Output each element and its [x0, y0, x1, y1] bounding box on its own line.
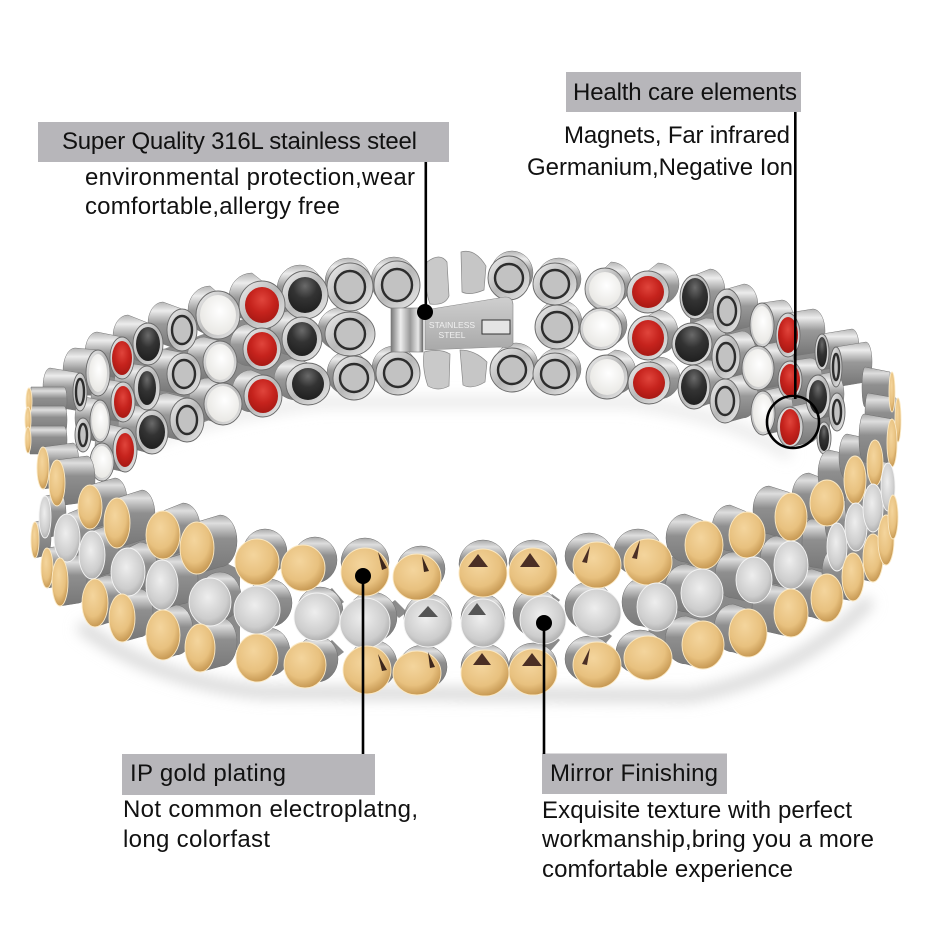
shadow: bracelet ground shadows — [80, 402, 870, 696]
callout: Mirror Finishing: Exquisite texture with perfect — [542, 797, 852, 824]
callout: Super Quality 316L stainless steel — [38, 122, 449, 320]
callout: Mirror Finishing: comfortable experience — [542, 856, 793, 883]
clasp: stainless steel fold-over buckle: STAINLESS — [429, 320, 475, 330]
clasp: stainless steel fold-over buckle: STEEL — [439, 330, 466, 340]
callout: Super Quality 316L stainless steel: comfortable,allergy free — [85, 193, 340, 220]
callout: Mirror Finishing: workmanship,bring you a more — [541, 826, 874, 853]
bracelet: front bead bodies — [30, 367, 896, 690]
callout: IP gold plating: Not common electroplatng, — [123, 796, 418, 823]
bracelet: bottom gold bead row — [31, 495, 898, 696]
reflections on centre beads — [378, 540, 640, 671]
bracelet: grey links between back rows — [95, 300, 830, 462]
callout: Super Quality 316L stainless steel: environmental protection,wear — [85, 164, 415, 191]
callout: IP gold plating — [122, 568, 418, 853]
callout: Health care elements: Magnets, Far infrared — [564, 122, 790, 149]
callout: IP gold plating: long colorfast — [123, 826, 270, 853]
callout: Super Quality 316L stainless steel: Super Quality 316L stainless steel — [62, 128, 417, 155]
callout: Health care elements: Germanium,Negative Ion — [527, 154, 793, 181]
bracelet: grey links between front rows — [60, 468, 885, 658]
bracelet: back bead bodies — [43, 251, 872, 472]
callout: Health care elements: Health care elements — [573, 79, 797, 106]
clasp: stainless steel fold-over buckle — [391, 251, 513, 389]
bracelet: top gold bead row — [25, 372, 901, 600]
callout: Mirror Finishing — [536, 615, 874, 883]
callout: Mirror Finishing: Mirror Finishing — [550, 760, 718, 787]
callout: IP gold plating: IP gold plating — [130, 760, 286, 787]
bracelet: middle mirror-polished silver bead row — [39, 463, 895, 648]
callout: Health care elements — [527, 72, 819, 448]
bracelet: back row beads with red, black, white enamel and magnet inlays — [73, 256, 845, 481]
